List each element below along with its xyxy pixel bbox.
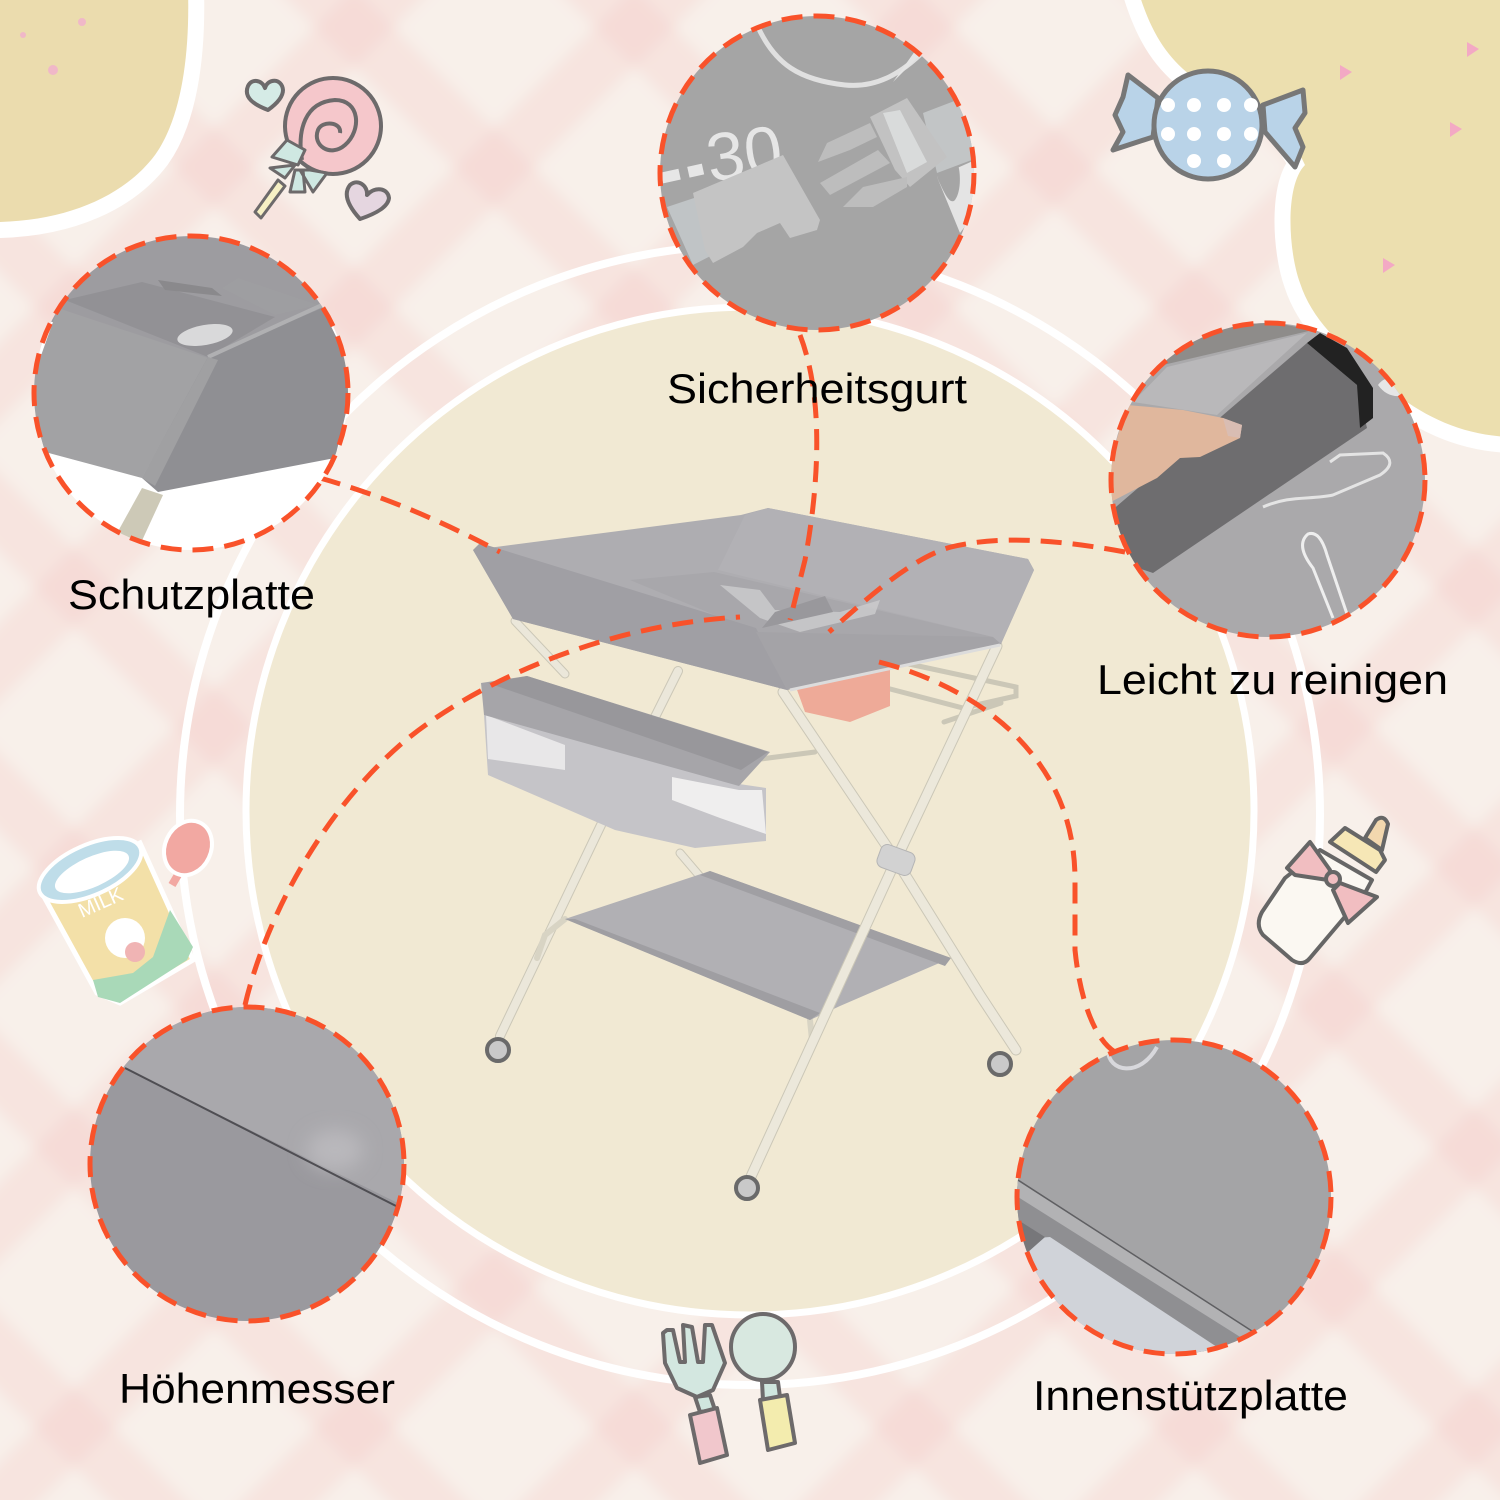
label: Innenstützplatte: Innenstützplatte	[1033, 1372, 1348, 1419]
central cream circle	[246, 307, 1254, 1315]
icon: lollipop	[247, 78, 389, 219]
icon: baby bottle	[1259, 818, 1388, 963]
label: Leicht zu reinigen: Leicht zu reinigen	[1097, 656, 1448, 703]
outer white ring	[180, 245, 1320, 1385]
icon: milk powder can	[30, 813, 221, 1003]
dashed connector lines	[245, 335, 1125, 1052]
hinge	[875, 843, 917, 877]
label: Sicherheitsgurt: Sicherheitsgurt	[667, 365, 967, 412]
detail circle: Leicht zu reinigen	[1105, 315, 1425, 637]
label: Schutzplatte: Schutzplatte	[68, 571, 315, 618]
table top	[473, 508, 1034, 690]
pink box under top	[796, 667, 890, 722]
corner blob: top right	[1138, 0, 1500, 437]
icon: candy	[1113, 71, 1305, 179]
corner blob: top left	[0, 0, 188, 222]
label: Höhenmesser: Höhenmesser	[119, 1365, 395, 1412]
changing table product	[473, 508, 1034, 1199]
lower shelf	[565, 871, 951, 1020]
icon: fork and spoon	[663, 1314, 795, 1463]
detail circle: Sicherheitsgurt: 30	[702, 111, 787, 197]
wheels	[487, 1039, 1011, 1199]
rear legs	[500, 621, 1016, 1070]
storage basket	[481, 676, 770, 848]
detail circle: Schutzplatte	[28, 230, 355, 550]
detail circle: Sicherheitsgurt	[660, 16, 985, 330]
detail circle: Höhenmesser	[80, 1000, 420, 1321]
front legs	[748, 646, 1016, 1183]
detail circle: Innenstützplatte	[1010, 1040, 1331, 1365]
icon: milk powder can: MILK	[75, 883, 127, 923]
